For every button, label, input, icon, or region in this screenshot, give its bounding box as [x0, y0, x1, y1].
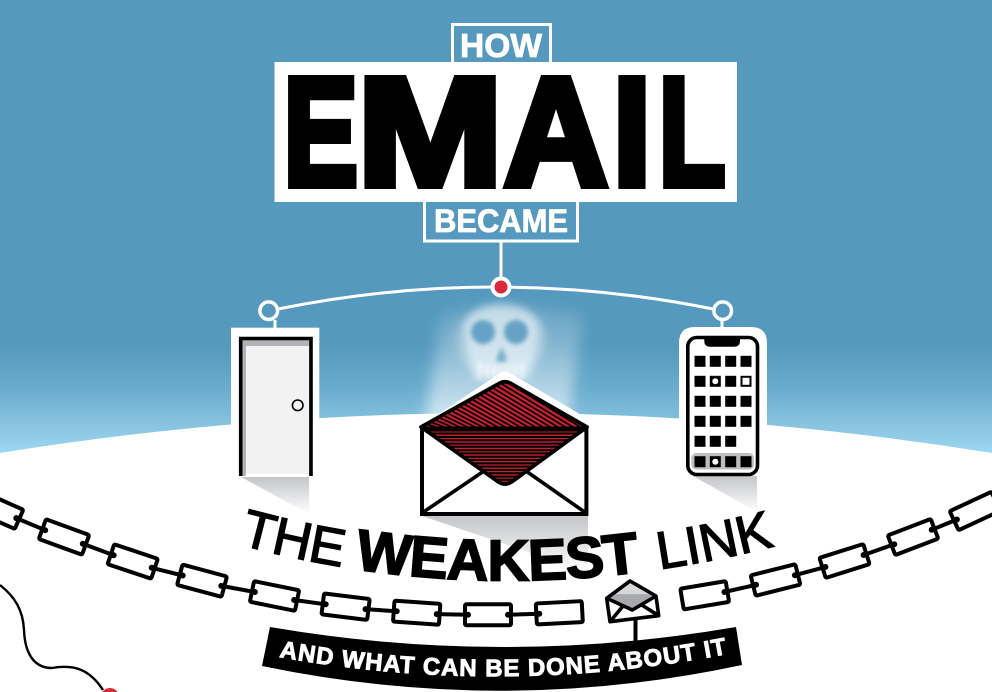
- chain connectors: [16, 518, 957, 615]
- envelope body: [422, 428, 586, 514]
- how label: HOW: [460, 27, 543, 64]
- phone halo: [679, 327, 767, 432]
- icon: door: [231, 328, 319, 514]
- email box: L: [659, 47, 725, 218]
- chain: [0, 491, 992, 625]
- door shadow: [241, 477, 309, 514]
- door node: [260, 302, 278, 320]
- title lockup: [274, 24, 737, 241]
- banner stem: [634, 620, 638, 642]
- email box: I: [613, 46, 651, 219]
- subtitle banner: [262, 620, 742, 691]
- phone body: [688, 338, 758, 474]
- chain links: [0, 491, 992, 625]
- phone node: [714, 302, 732, 320]
- headline: the weakest link: WEAKEST: [358, 528, 637, 582]
- banner text: AND WHAT CAN BE DONE ABOUT IT: [278, 637, 725, 677]
- squiggle line with red marker: [0, 585, 118, 692]
- headline: the weakest link: THE: [248, 508, 346, 568]
- icon: smartphone: [679, 327, 767, 512]
- email box: [274, 45, 737, 219]
- white ground dome: [0, 413, 992, 692]
- icon: small envelope: [607, 581, 659, 622]
- phone notch: [704, 337, 740, 347]
- became label: BECAME: [434, 203, 568, 239]
- envelope shadow: [422, 516, 588, 572]
- connector arc: [260, 242, 732, 329]
- headline: the weakest link: LINK: [657, 510, 776, 570]
- email box: M: [357, 46, 503, 218]
- door knob: [292, 400, 303, 411]
- envelope halo: [418, 372, 600, 440]
- phone shadow: [693, 476, 757, 512]
- headline: the weakest link: [248, 508, 776, 582]
- red node: [492, 278, 510, 296]
- phone dock: [691, 453, 754, 470]
- email box: A: [504, 46, 608, 218]
- app grid: [694, 356, 752, 467]
- ghost skull rising from envelope: [424, 302, 583, 425]
- envelope flap: [421, 382, 587, 484]
- email box: E: [284, 45, 358, 218]
- icon: open envelope: [419, 372, 589, 564]
